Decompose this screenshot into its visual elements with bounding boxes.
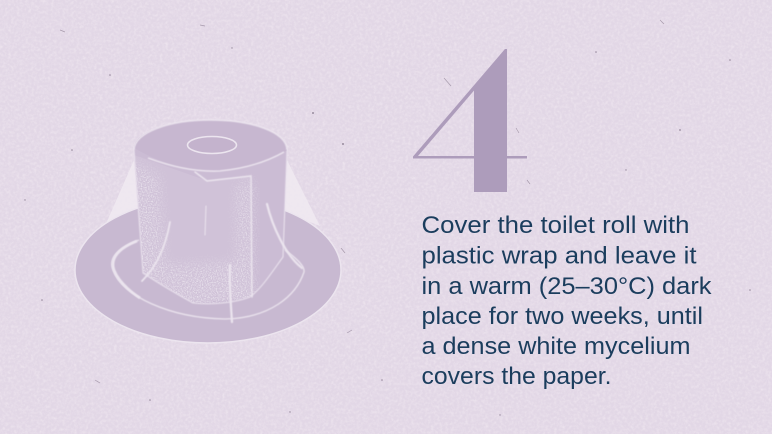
instruction text: plastic wrap and leave it — [422, 242, 697, 270]
instruction text — [422, 212, 712, 390]
paper flap and wrap highlights — [142, 172, 302, 322]
roll core hole — [188, 136, 236, 154]
glow behind the roll — [105, 160, 320, 226]
instruction text: in a warm (25–30°C) dark — [422, 273, 712, 300]
instruction text: covers the paper. — [422, 363, 612, 390]
roll top face — [134, 120, 287, 171]
instruction text: a dense white mycelium — [422, 333, 690, 360]
instruction text: Cover the toilet roll with — [422, 212, 690, 239]
illustration: toilet roll on a plate — [75, 120, 341, 343]
roll body — [134, 148, 286, 305]
step number 4 — [413, 49, 527, 192]
instruction text: place for two weeks, until — [422, 303, 703, 330]
plate — [75, 197, 341, 343]
